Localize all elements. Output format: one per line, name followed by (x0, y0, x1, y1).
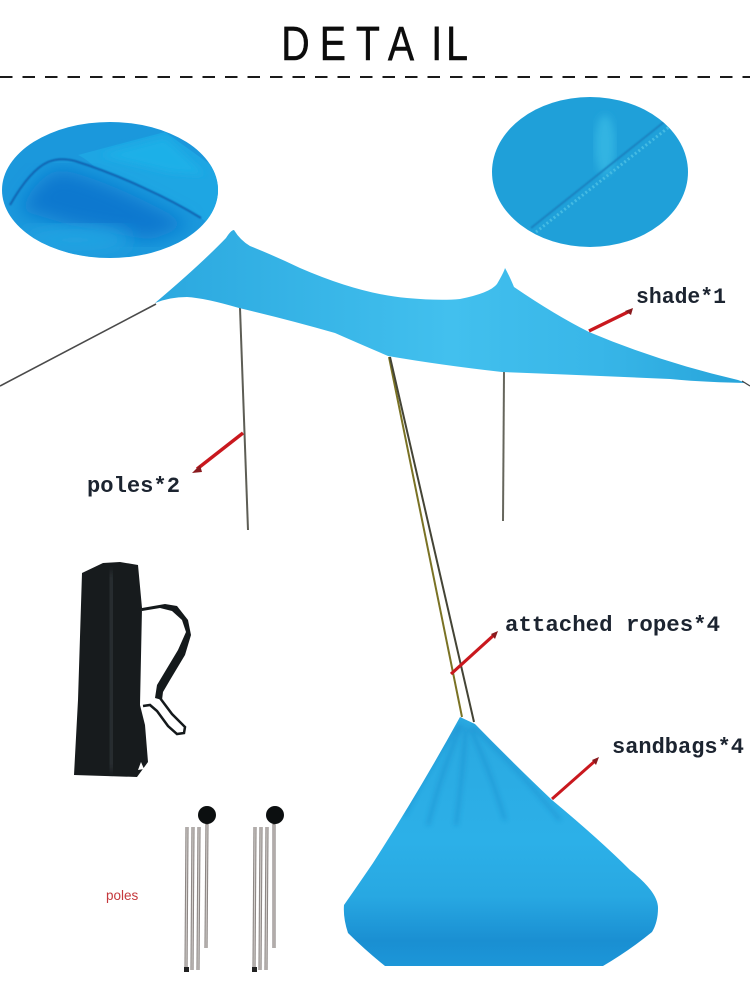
shade canopy (155, 230, 746, 383)
guy line right (742, 381, 750, 386)
label: sandbags: sandbags*4 (612, 735, 744, 760)
title: D (281, 17, 310, 71)
title: A (388, 17, 415, 71)
guy line left (0, 304, 156, 386)
title: L (446, 17, 468, 71)
poles caption: poles (106, 888, 139, 903)
label: poles: poles*2 (87, 474, 180, 499)
title: T (356, 17, 380, 71)
arrow: sandbags (552, 757, 599, 799)
label: shade: shade*1 (636, 285, 726, 310)
arrow: poles (192, 433, 243, 473)
title: E (320, 17, 346, 71)
detail circle: seam (490, 95, 690, 250)
carry bag (74, 562, 191, 777)
pole right (503, 372, 504, 521)
detail circle: hem (0, 120, 225, 260)
title divider (0, 76, 750, 78)
label: attached ropes: attached ropes*4 (505, 613, 720, 638)
title: I (431, 17, 442, 71)
arrow: ropes (451, 631, 498, 674)
arrow: shade (589, 308, 633, 331)
folded poles (184, 806, 284, 972)
pole left (240, 308, 248, 530)
sandbag (344, 717, 658, 966)
ropes to sandbag (389, 357, 474, 722)
